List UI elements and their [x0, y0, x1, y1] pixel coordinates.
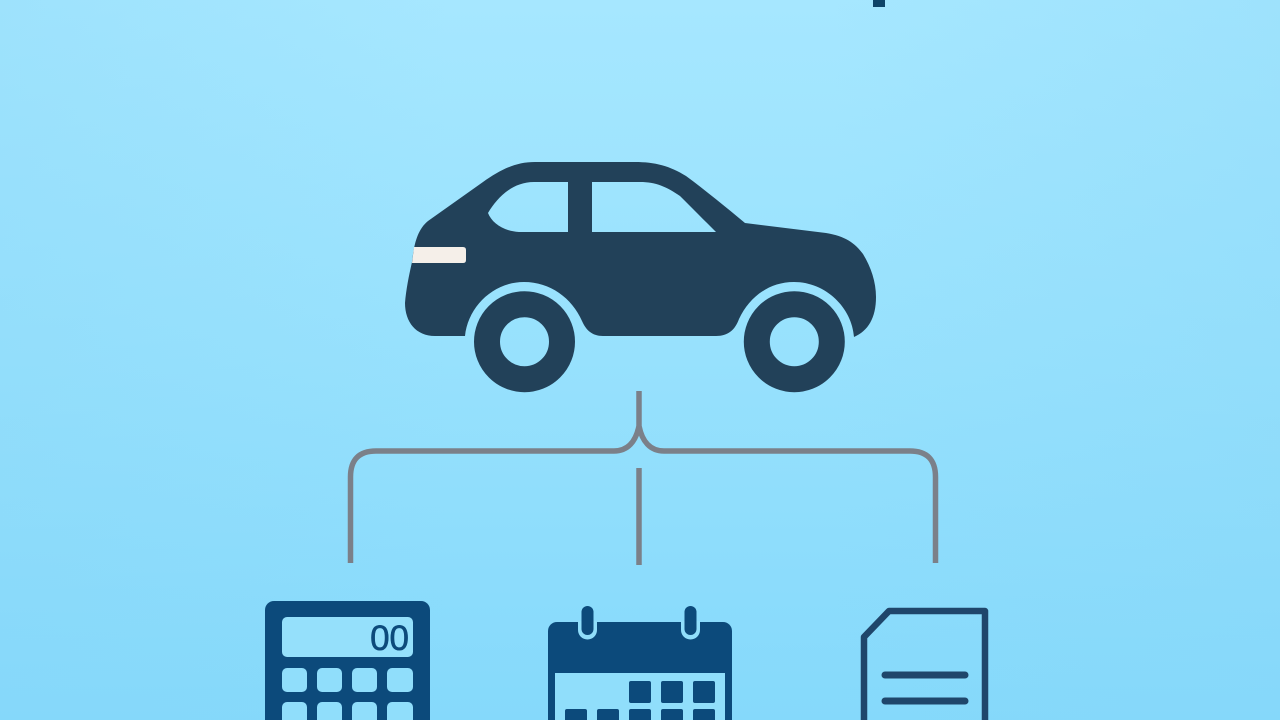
- calendar page: [555, 673, 725, 720]
- calendar day squares: [565, 681, 715, 720]
- title fragment: cropped descender: [873, 0, 885, 7]
- document text lines: [885, 675, 965, 701]
- calendar rings: [582, 606, 696, 635]
- icon: calendar: [548, 606, 732, 720]
- calculator body: [265, 601, 430, 720]
- document outline: [864, 611, 985, 720]
- car light: [412, 247, 466, 263]
- calculator keys: [282, 668, 413, 720]
- icon: document: [864, 611, 985, 720]
- car body: [405, 162, 876, 337]
- front wheel: [757, 304, 832, 379]
- connector: bracket from car to icons: [350, 391, 936, 565]
- icon: calculator: [265, 601, 430, 720]
- calculator digits: 00: [370, 619, 409, 658]
- calendar frame: [548, 622, 732, 720]
- calculator screen: [282, 617, 413, 657]
- calendar ring halos: [578, 621, 700, 640]
- rear wheel: [487, 304, 562, 379]
- icon: car: [405, 162, 876, 379]
